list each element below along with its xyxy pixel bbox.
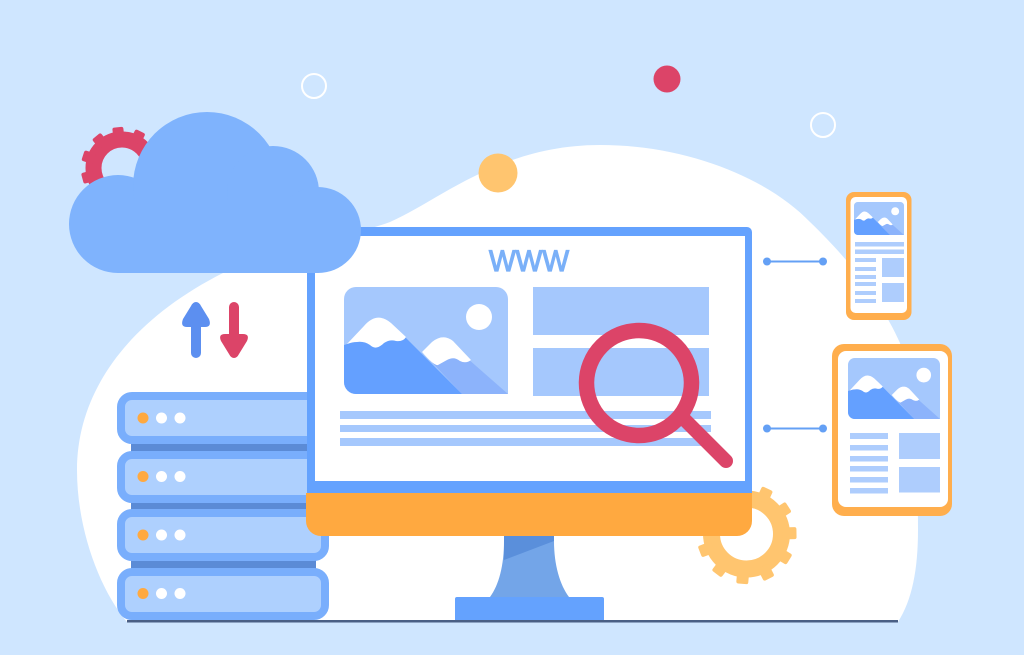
arrow: download	[220, 302, 248, 358]
phone image	[854, 202, 904, 235]
phone	[846, 192, 912, 320]
white background blob	[77, 145, 918, 622]
monitor frame	[307, 227, 752, 494]
tablet	[832, 344, 952, 516]
icon: magnifying glass	[586, 330, 726, 461]
decorative red dot	[654, 66, 680, 92]
connector: monitor to phone	[763, 258, 827, 266]
connector: monitor to tablet	[763, 424, 827, 432]
decorative ring left	[302, 74, 326, 98]
monitor stand	[455, 536, 604, 620]
server stack	[121, 396, 325, 616]
arrow: upload	[182, 302, 210, 358]
monitor	[306, 227, 752, 620]
decorative ring right	[811, 113, 835, 137]
icon: red gear	[81, 127, 150, 196]
icon: orange gear	[698, 486, 797, 584]
server unit 4	[121, 572, 325, 616]
floor line	[127, 620, 898, 622]
server unit 1	[121, 396, 325, 440]
tablet text rows	[850, 433, 940, 494]
decorative yellow dot	[478, 154, 518, 192]
server unit 3	[121, 513, 325, 557]
content block 2	[533, 348, 709, 396]
monitor screen	[315, 236, 745, 481]
server unit 2	[121, 455, 325, 499]
image placeholder: mountains	[344, 287, 508, 394]
phone text rows	[855, 242, 904, 303]
text lines	[340, 411, 711, 446]
content block 1	[533, 287, 709, 335]
tablet image	[848, 358, 940, 419]
heading: WWW: WWW	[489, 245, 570, 278]
monitor base bar	[306, 493, 752, 536]
cloud	[69, 112, 361, 273]
